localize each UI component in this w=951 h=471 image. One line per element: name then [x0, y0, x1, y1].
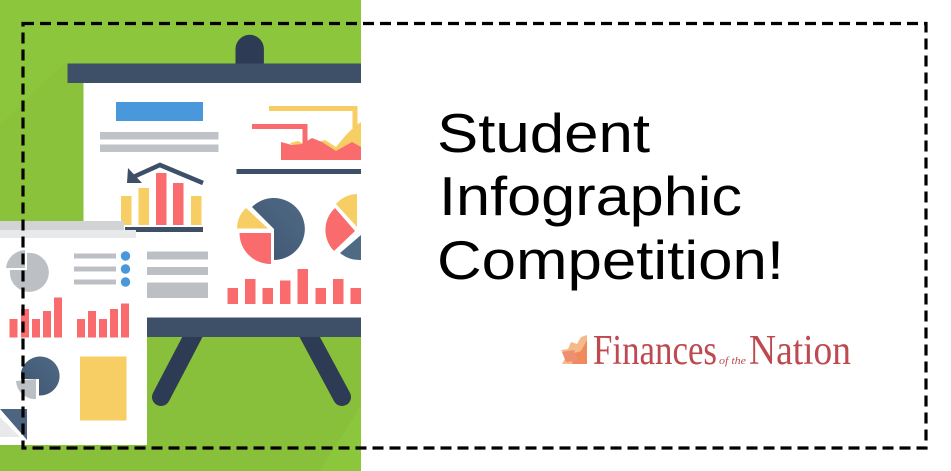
- pie chart second: [325, 194, 361, 260]
- panel: foreground sheet: [0, 221, 208, 445]
- easel leg left: [161, 332, 195, 397]
- sheet header strips: [0, 221, 136, 238]
- logo wordmark: Nation: [749, 328, 851, 374]
- icon: board hanger knob: [236, 35, 264, 64]
- sheet bar chart right: [77, 304, 129, 338]
- legend lines: [74, 254, 116, 284]
- grey text blocks: [147, 252, 208, 298]
- title: Competition!: [437, 229, 784, 291]
- pie chart large: [237, 198, 305, 264]
- logo wordmark: of the: [719, 355, 746, 367]
- yellow block: [80, 356, 126, 420]
- navy and grey pie chart: [16, 357, 60, 399]
- logo wordmark: Finances: [593, 328, 717, 374]
- legend dots: [121, 251, 130, 287]
- grey pie chart: [6, 250, 49, 292]
- bar chart bottom: [228, 269, 361, 304]
- sheet page: [0, 232, 147, 445]
- navy triangle corner: [0, 409, 27, 440]
- grey text lines: [100, 132, 218, 152]
- sheet bar chart left: [10, 298, 62, 338]
- area chart with callouts: [252, 106, 361, 160]
- title: Infographic: [439, 165, 742, 227]
- board bottom bar: [147, 318, 361, 337]
- panel: green illustration background: [0, 0, 362, 471]
- title: [437, 102, 784, 291]
- title: Student: [437, 102, 650, 164]
- logo wordmark: [593, 328, 851, 374]
- easel leg right: [307, 332, 342, 397]
- icon: maple leaf: [561, 335, 587, 364]
- board top bar: [68, 64, 362, 83]
- bar chart with arrow: [121, 165, 203, 232]
- logo: Finances of the Nation: [561, 328, 851, 374]
- white board surface: [84, 83, 362, 318]
- blue heading block: [116, 102, 203, 121]
- icon: presentation board: [68, 35, 362, 397]
- navy rule: [236, 169, 362, 174]
